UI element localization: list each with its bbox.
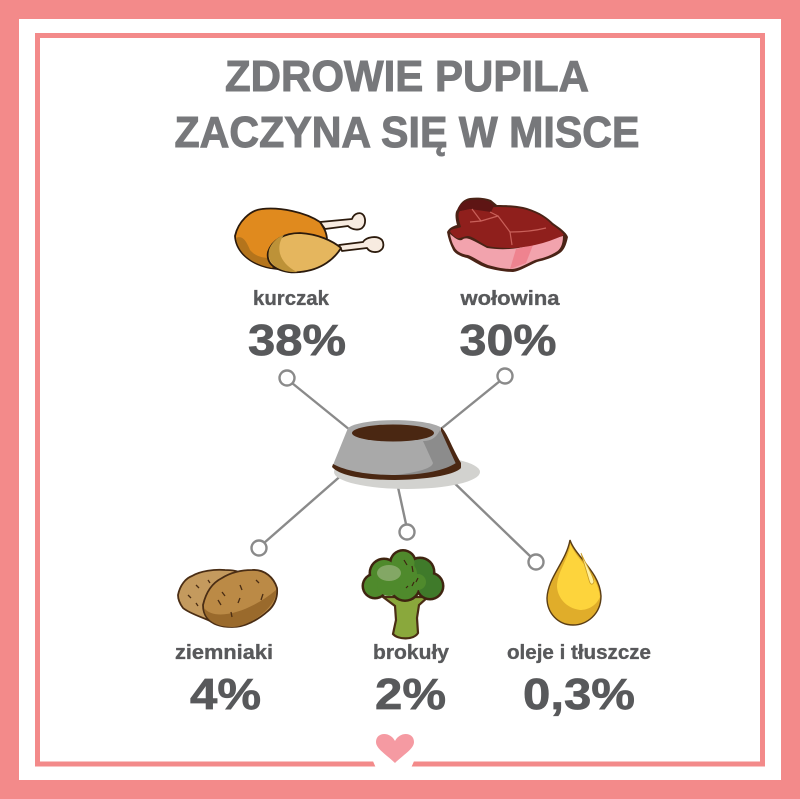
label: kurczak: 38%	[248, 316, 346, 365]
label: oleje i tłuszcze: 0,3%	[523, 670, 635, 719]
label: wołowina: 30%	[460, 316, 556, 365]
icon: oil drop	[547, 540, 601, 625]
label: oleje i tłuszcze	[507, 641, 651, 719]
label: ziemniaki	[175, 641, 273, 719]
connector lines	[252, 368, 544, 570]
icon: heart	[376, 734, 414, 763]
label: kurczak: kurczak	[253, 287, 330, 310]
icon: potatoes	[178, 570, 277, 627]
label: wołowina	[459, 287, 560, 365]
label: ziemniaki: ziemniaki	[175, 641, 273, 664]
title: ZDROWIE PUPILA	[225, 52, 589, 101]
icon: bowl	[332, 420, 480, 489]
label: brokuły: 2%	[375, 670, 446, 719]
label: brokuły: brokuły	[373, 641, 450, 664]
label: oleje i tłuszcze: oleje i tłuszcze	[507, 641, 651, 664]
label: wołowina: wołowina	[459, 287, 560, 310]
title	[174, 52, 640, 157]
title: ZACZYNA SIĘ W MISCE	[174, 108, 640, 157]
icon: beef steak	[447, 198, 568, 272]
label: brokuły	[373, 641, 450, 719]
icon: chicken	[235, 209, 383, 272]
label: ziemniaki: 4%	[190, 670, 261, 719]
icon: broccoli	[362, 549, 444, 638]
label: kurczak	[248, 287, 346, 365]
